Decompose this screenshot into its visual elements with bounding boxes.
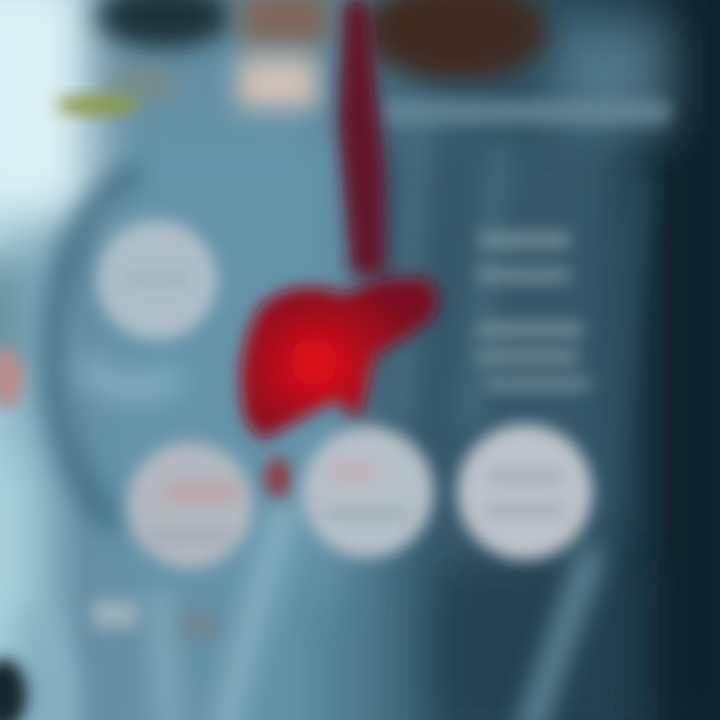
photo: skin neck	[112, 0, 330, 108]
circle: bottom left	[127, 442, 253, 568]
photo: dark top-left shape	[97, 0, 233, 48]
text block: right upper	[478, 232, 570, 282]
circle: bottom middle	[302, 426, 434, 558]
liver	[241, 278, 438, 440]
liver lower red accent	[265, 458, 291, 498]
esophagus tube	[338, 0, 386, 275]
text block: right lower	[478, 322, 590, 390]
photo: brown hair	[363, 0, 547, 82]
bottom-left dark corner	[0, 659, 27, 720]
circle: bottom right	[457, 424, 593, 560]
left edge red accent	[0, 348, 24, 408]
bottom text	[92, 600, 218, 638]
heading bar	[378, 100, 670, 124]
photo: yellow-green accent	[56, 95, 140, 115]
circle: top left	[97, 220, 217, 340]
